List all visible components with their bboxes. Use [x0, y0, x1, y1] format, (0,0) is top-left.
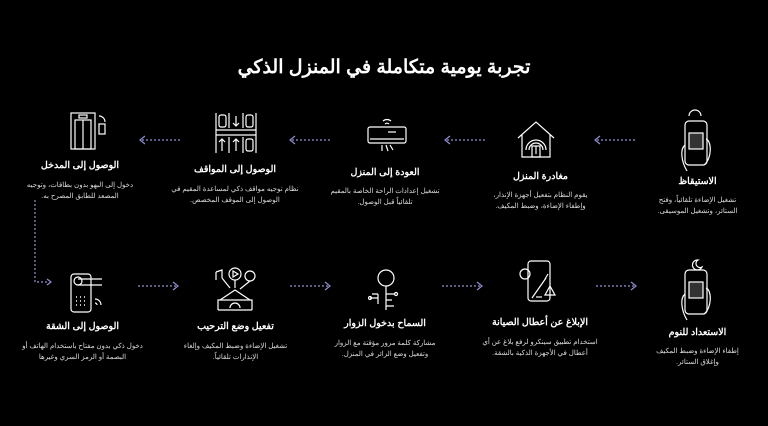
step: maintenance	[482, 315, 598, 357]
step: parking: نظام توجيه مواقف ذكي لمساعدة المقيم في الوصول إلى الموقف المخصص.	[171, 186, 299, 204]
step: maintenance: استخدام تطبيق سينكرو لرفع بلاغ عن أي أعطال في الأجهزة الذكية بالشقة.	[482, 339, 598, 357]
step: return home	[330, 167, 440, 206]
step: sleep: إطفاء الإضاءة وضبط المكيف وإغلاق الستائر.	[656, 348, 739, 366]
title: تجربة يومية متكاملة في المنزل الذكي	[238, 57, 530, 78]
step: entrance: الوصول إلى المدخل	[41, 160, 119, 171]
icon: parking	[215, 113, 257, 153]
step: entrance: دخول إلى البهو بدون بطاقات، وتوجيه المصعد للطابق المصرح به.	[27, 182, 133, 200]
icon: phone wake	[681, 109, 711, 172]
step: sleep	[656, 327, 739, 366]
step: apartment: الوصول إلى الشقة	[46, 321, 119, 332]
step: visitors: مشاركة كلمة مرور مؤقتة مع الزوار وتفعيل وضع الزائر في المنزل.	[335, 340, 435, 358]
step: wake up: الاستيقاظ	[678, 176, 717, 187]
step: visitors	[334, 318, 435, 358]
step: welcome: تشغيل الإضاءة وضبط المكيف وإلغاء الإنذارات تلقائياً.	[184, 343, 287, 361]
step: parking: الوصول إلى المواقف	[194, 164, 276, 175]
step: wake up: تشغيل الإضاءة تلقائياً، وفتح الستائر، وتشغيل الموسيقى.	[658, 197, 737, 215]
step: welcome	[184, 321, 287, 361]
step: leaving: يقوم النظام بتفعيل أجهزة الإنذار، وإطفاء الإضاءة، وضبط المكيف.	[493, 192, 588, 210]
icon: visitor key	[368, 269, 398, 310]
icon: phone moon	[681, 259, 711, 320]
step: visitors: السماح بدخول الزوار	[344, 318, 426, 329]
step: entrance	[27, 160, 133, 200]
icon: welcome mode	[215, 267, 256, 311]
step: return home: العودة إلى المنزل	[350, 167, 420, 178]
step: leaving: مغادرة المنزل	[513, 171, 568, 182]
step: apartment: دخول ذكي بدون مفتاح باستخدام الهاتف أو البصمة أو الرمز السري وغيرها	[22, 343, 143, 361]
step: maintenance: الإبلاغ عن أعطال الصيانة	[492, 317, 588, 328]
step: parking	[171, 164, 299, 204]
step: apartment	[22, 321, 143, 361]
step: wake up	[658, 176, 737, 215]
icon: house	[518, 121, 554, 158]
icon: maintenance	[519, 260, 556, 302]
icon: elevator	[70, 112, 106, 150]
step: welcome: تفعيل وضع الترحيب	[197, 321, 274, 332]
icon: air conditioner	[367, 118, 407, 152]
step: return home: تشغيل إعدادات الراحة الخاصة بالمقيم تلقائياً قبل الوصول.	[330, 188, 440, 206]
step: leaving	[493, 171, 588, 210]
icon: door lock	[70, 273, 102, 313]
step: sleep: الاستعداد للنوم	[669, 327, 726, 338]
